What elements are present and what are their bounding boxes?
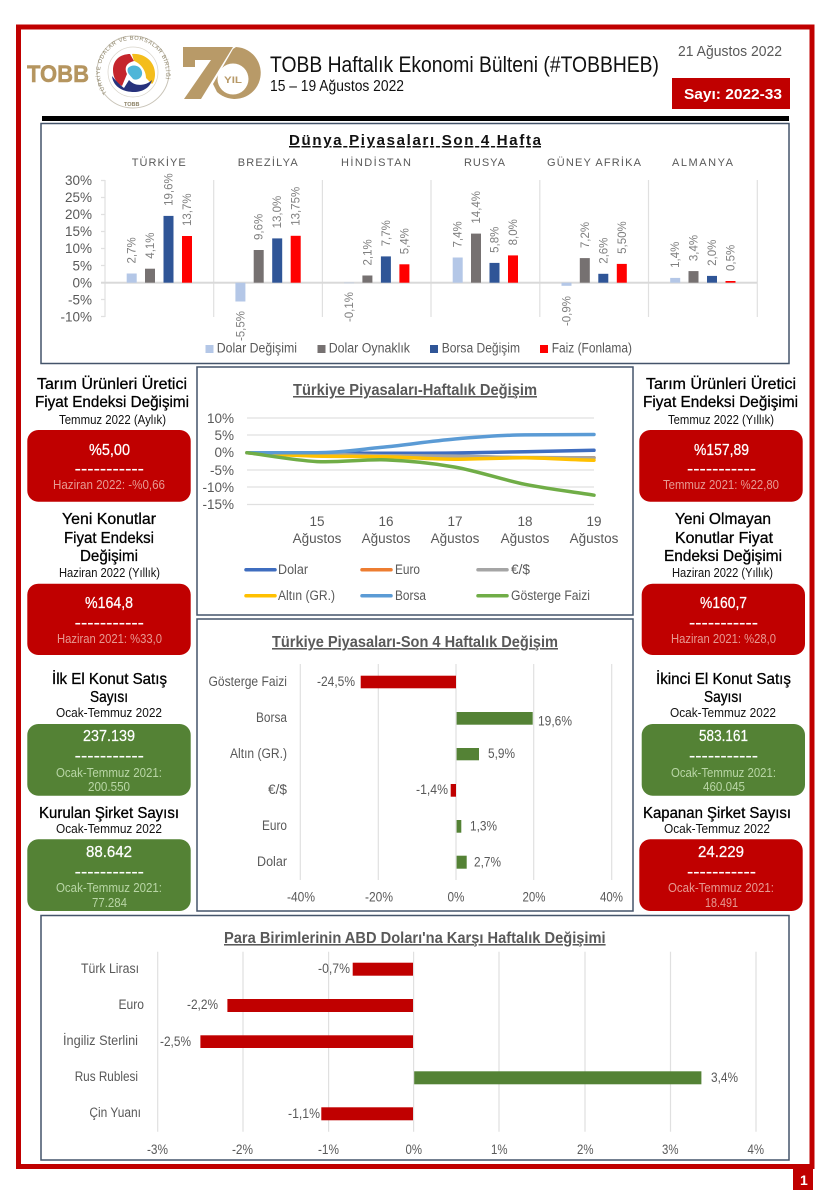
x axis labels: 17 <box>447 514 463 529</box>
bars <box>361 676 533 869</box>
line series <box>247 434 594 495</box>
left stat: new housing price index: Yeni Konutlar <box>62 511 157 528</box>
country labels: GÜNEY AFRİKA <box>547 156 642 169</box>
value labels: -24,5% <box>317 674 355 689</box>
publication date: 21 Ağustos 2022 <box>678 44 782 60</box>
issue badge <box>672 78 790 109</box>
bars: Güney Afrika: 5,50% <box>617 221 629 254</box>
x axis labels: 40% <box>600 890 623 905</box>
category labels <box>63 961 144 1120</box>
left stat: monthly agricultural PPI: Fiyat Endeksi Değişimi <box>35 394 189 411</box>
country labels: BREZİLYA <box>238 156 298 169</box>
logo: 70 yıl <box>183 47 261 99</box>
left stat: monthly agricultural PPI: Haziran 2022: -%0,66 <box>53 478 165 492</box>
right stat: yearly agricultural PPI: %157,89 <box>694 442 749 459</box>
y axis labels: 15% <box>65 224 92 239</box>
right stat: companies closed: Ocak-Temmuz 2021: <box>668 881 774 895</box>
x axis labels: 19 <box>586 514 602 529</box>
panel: world markets <box>41 124 789 364</box>
bars: Türkiye: 19,6% <box>164 173 176 206</box>
right stat: existing housing price index: Haziran 2022 (Yıllık) <box>672 566 773 580</box>
left stat: new housing price index <box>27 511 191 655</box>
y axis labels: 0% <box>214 445 234 460</box>
heading: weekly change: Türkiye Piyasaları-Haftalık Değişim <box>293 382 537 399</box>
right stat: yearly agricultural PPI: Temmuz 2022 (Yıllık) <box>668 413 774 427</box>
x axis labels: 4% <box>748 1142 764 1157</box>
left stat: first-hand housing sales: Ocak-Temmuz 2021: <box>56 766 162 780</box>
left stat: new housing price index: ----------- <box>75 615 144 630</box>
right stat: yearly agricultural PPI <box>639 375 803 502</box>
x axis labels: 0% <box>406 1142 422 1157</box>
legend: world markets: Borsa Değişim <box>442 341 520 356</box>
y axis labels: -10% <box>60 310 92 324</box>
x axis labels <box>293 514 619 546</box>
right stat: yearly agricultural PPI: Fiyat Endeksi Değişimi <box>643 394 798 411</box>
right stat: second-hand housing sales: Ocak-Temmuz 2021: <box>671 766 776 780</box>
panel: currencies against USD <box>41 916 789 1160</box>
y axis labels <box>60 173 92 324</box>
x axis labels: Ağustos <box>570 531 619 546</box>
value labels: 1,3% <box>470 819 497 834</box>
value labels: -0,7% <box>318 961 350 976</box>
bars: Almanya: 1,4% <box>670 242 682 268</box>
bars: Rusya: 8,0% <box>508 219 520 245</box>
legend: line series: Gösterge Faizi <box>511 588 590 603</box>
value labels: 19,6% <box>538 714 572 729</box>
logo: TOBB seal: TOBB <box>124 102 140 108</box>
right stat: yearly agricultural PPI: ----------- <box>687 461 756 476</box>
right stat: second-hand housing sales: ----------- <box>689 748 758 763</box>
right stat: companies closed: 24.229 <box>698 844 744 861</box>
x axis labels <box>287 890 623 905</box>
x axis labels: Ağustos <box>293 531 342 546</box>
y axis labels: 5% <box>214 428 234 443</box>
right stat: companies closed <box>639 805 803 911</box>
bars: Hindistan: -0,1% <box>344 292 356 322</box>
right stat: companies closed: Kapanan Şirket Sayısı <box>643 805 791 822</box>
logo: TOBB seal: TÜRKİYE ODALAR VE BORSALAR BİRLİĞİ <box>95 36 171 96</box>
right stat: second-hand housing sales <box>642 669 805 796</box>
value labels: 5,9% <box>488 746 515 761</box>
left stat: monthly agricultural PPI: %5,00 <box>89 442 130 459</box>
bars: Güney Afrika: 7,2% <box>580 222 592 248</box>
right stat: second-hand housing sales: İkinci El Konut Satış <box>656 669 791 688</box>
left stat: companies founded: ----------- <box>75 864 144 879</box>
value labels <box>317 674 572 870</box>
header rule <box>42 116 789 121</box>
right stat: existing housing price index: Endeksi Değişimi <box>664 548 782 565</box>
bars: Türkiye <box>127 173 194 283</box>
left stat: first-hand housing sales: 237.139 <box>83 728 135 745</box>
x axis labels: -3% <box>147 1142 168 1157</box>
left stat: first-hand housing sales: İlk El Konut Satış <box>52 669 167 688</box>
grid separators <box>101 180 757 317</box>
issue badge: Sayı: 2022-33 <box>684 86 782 103</box>
left stat: monthly agricultural PPI: Tarım Ürünleri Üretici <box>37 375 187 393</box>
category labels: Türk Lirası <box>81 961 139 976</box>
right stat: second-hand housing sales: 583.161 <box>699 728 748 745</box>
right stat: companies closed: 18.491 <box>705 896 738 910</box>
bars: Almanya: 2,0% <box>707 240 719 266</box>
left stat: monthly agricultural PPI <box>27 375 191 502</box>
value labels: -1,1% <box>288 1106 320 1121</box>
right stat: existing housing price index: %160,7 <box>700 595 747 612</box>
left stat: new housing price index: Haziran 2021: %33,0 <box>57 632 162 646</box>
x axis labels: -2% <box>232 1142 253 1157</box>
header <box>27 36 790 109</box>
legend: line series: Borsa <box>395 588 426 603</box>
right stat: existing housing price index: ----------- <box>689 615 758 630</box>
country labels: ALMANYA <box>672 157 734 169</box>
left stat: companies founded <box>27 805 191 911</box>
left stat: monthly agricultural PPI: ----------- <box>75 461 144 476</box>
heading: 4-week change: Türkiye Piyasaları-Son 4 Haftalık Değişim <box>272 634 558 651</box>
category labels: €/$ <box>268 782 287 797</box>
bars <box>200 963 701 1120</box>
right stat: existing housing price index <box>642 511 805 655</box>
x axis labels: 20% <box>522 890 546 905</box>
y axis labels: 30% <box>65 173 92 188</box>
bars: Hindistan: 7,7% <box>381 220 393 246</box>
left stat: first-hand housing sales: ----------- <box>75 748 144 763</box>
left stat: first-hand housing sales: 200.550 <box>88 780 130 794</box>
x axis labels: -20% <box>365 890 393 905</box>
right stat: existing housing price index: Haziran 2021: %28,0 <box>671 632 776 646</box>
legend: line series: €/$ <box>511 562 530 577</box>
x axis labels: Ağustos <box>431 531 480 546</box>
country labels: HİNDİSTAN <box>341 156 411 169</box>
left stat: companies founded: Ocak-Temmuz 2022 <box>56 822 162 836</box>
bars: Hindistan: 2,1% <box>362 239 374 266</box>
bars: Almanya <box>670 235 738 283</box>
value labels: -2,2% <box>187 997 218 1012</box>
right stat: yearly agricultural PPI: Tarım Ürünleri Üretici <box>646 375 796 393</box>
y axis labels: 0% <box>72 276 92 290</box>
left stat: first-hand housing sales <box>27 669 191 796</box>
left stat: companies founded: 77.284 <box>92 896 127 910</box>
x axis labels: 15 <box>309 514 325 529</box>
bars: Brezilya: 13,75% <box>291 187 303 226</box>
bars: Brezilya: 9,6% <box>254 214 266 240</box>
bars: Brezilya: 13,0% <box>272 196 284 228</box>
value labels <box>160 961 738 1121</box>
y axis labels: 20% <box>65 207 92 222</box>
x axis labels <box>147 1142 764 1157</box>
left stat: new housing price index: Haziran 2022 (Yıllık) <box>59 566 160 580</box>
bars: Türkiye: 4,1% <box>145 232 157 259</box>
bars: Rusya: 14,4% <box>471 191 483 224</box>
category labels: Altın (GR.) <box>230 746 287 761</box>
bars: Türkiye: 2,7% <box>127 237 139 264</box>
legend: line series: Altın (GR.) <box>278 588 335 603</box>
y axis labels: 10% <box>207 411 234 426</box>
panel: 4-week Türkiye bar chart <box>197 619 633 911</box>
y axis labels: -5% <box>68 292 92 308</box>
bars: Rusya: 7,4% <box>453 221 465 248</box>
legend: line series: Dolar <box>278 562 308 577</box>
value labels: -1,4% <box>416 782 448 797</box>
legend: world markets: Dolar Değişimi <box>217 341 297 356</box>
x axis labels: 3% <box>662 1142 678 1157</box>
left stat: first-hand housing sales: Ocak-Temmuz 2022 <box>56 706 162 720</box>
value labels: 3,4% <box>711 1070 738 1085</box>
right stat: existing housing price index: Konutlar Fiyat <box>675 530 774 547</box>
date range: 15 – 19 Ağustos 2022 <box>270 78 404 95</box>
bars: Hindistan <box>344 220 411 322</box>
x axis labels: -1% <box>318 1142 339 1157</box>
page number <box>793 1169 813 1190</box>
category labels: Çin Yuanı <box>89 1105 141 1120</box>
bars: Güney Afrika <box>562 221 629 326</box>
x axis labels: 16 <box>378 514 394 529</box>
y axis labels: -5% <box>210 463 234 478</box>
bars: Güney Afrika: 2,6% <box>598 238 610 264</box>
y axis labels: -10% <box>202 480 234 495</box>
bars: Rusya: 5,8% <box>490 227 502 253</box>
legend: world markets: Dolar Oynaklık <box>329 341 410 356</box>
value labels: 2,7% <box>474 855 501 870</box>
left stat: companies founded: Ocak-Temmuz 2021: <box>56 881 162 895</box>
y axis labels: 10% <box>65 241 92 256</box>
legend: world markets: Faiz (Fonlama) <box>552 341 632 356</box>
x axis labels: Ağustos <box>362 531 411 546</box>
bars: Almanya: 0,5% <box>726 245 738 271</box>
legend: line series <box>246 562 590 603</box>
heading: currencies: Para Birimlerinin ABD Doları'na Karşı Haftalık Değişimi <box>224 930 606 947</box>
y axis labels <box>202 411 234 512</box>
left stat: companies founded: Kurulan Şirket Sayısı <box>39 805 179 822</box>
category labels: Rus Rublesi <box>75 1069 138 1084</box>
left stat: new housing price index: %164,8 <box>85 595 133 612</box>
panel: weekly Türkiye line chart <box>197 367 633 615</box>
right stat: yearly agricultural PPI: Temmuz 2021: %22,80 <box>663 478 779 492</box>
right stat: existing housing price index: Yeni Olmayan <box>675 511 771 528</box>
logo: TOBB wordmark: TOBB <box>27 61 89 88</box>
category labels <box>208 674 287 869</box>
y axis labels: 5% <box>72 258 92 274</box>
bars: Almanya: 3,4% <box>688 235 700 261</box>
logo: 70 yıl: YIL <box>224 75 242 86</box>
category labels: İngiliz Sterlini <box>63 1033 138 1048</box>
left stat: new housing price index: Fiyat Endeksi <box>64 530 154 547</box>
x axis labels: 2% <box>577 1142 594 1157</box>
legend: world markets <box>206 341 632 356</box>
right stat: companies closed: Ocak-Temmuz 2022 <box>664 822 770 836</box>
country labels <box>132 156 734 169</box>
left stat: companies founded: 88.642 <box>86 844 132 861</box>
legend: line series: Euro <box>395 562 420 577</box>
bars: Rusya <box>453 191 520 283</box>
value labels: -2,5% <box>160 1034 191 1049</box>
bars: Güney Afrika: -0,9% <box>562 296 574 326</box>
bars: Brezilya <box>235 187 303 341</box>
y axis labels: -15% <box>202 497 234 512</box>
right stat: second-hand housing sales: Sayısı <box>704 689 742 706</box>
left stat: monthly agricultural PPI: Temmuz 2022 (Aylık) <box>59 413 166 427</box>
category labels: Euro <box>262 818 287 833</box>
category labels: Euro <box>118 997 144 1012</box>
x axis labels: 1% <box>491 1142 508 1157</box>
bars: Hindistan: 5,4% <box>399 228 411 254</box>
y axis labels: 25% <box>65 190 92 205</box>
category labels: Borsa <box>256 710 287 725</box>
right stat: second-hand housing sales: 460.045 <box>703 780 745 794</box>
country labels: TÜRKİYE <box>132 156 186 169</box>
x axis labels: -40% <box>287 890 315 905</box>
heading: world markets: Dünya Piyasaları Son 4 Hafta <box>289 132 542 149</box>
bars: Brezilya: -5,5% <box>235 311 247 341</box>
bars: Türkiye: 13,7% <box>182 193 194 226</box>
x axis labels: 0% <box>448 890 464 905</box>
right stat: second-hand housing sales: Ocak-Temmuz 2022 <box>670 706 776 720</box>
category labels: Dolar <box>257 854 287 869</box>
category labels: Gösterge Faizi <box>208 674 287 689</box>
x axis labels: Ağustos <box>501 531 550 546</box>
x axis labels: 18 <box>517 514 533 529</box>
country labels: RUSYA <box>464 157 506 169</box>
left stat: first-hand housing sales: Sayısı <box>90 689 128 706</box>
left stat: new housing price index: Değişimi <box>80 548 138 565</box>
right stat: companies closed: ----------- <box>687 864 756 879</box>
title: TOBB Haftalık Ekonomi Bülteni (#TOBBHEB) <box>270 52 659 77</box>
page number: 1 <box>800 1172 808 1188</box>
